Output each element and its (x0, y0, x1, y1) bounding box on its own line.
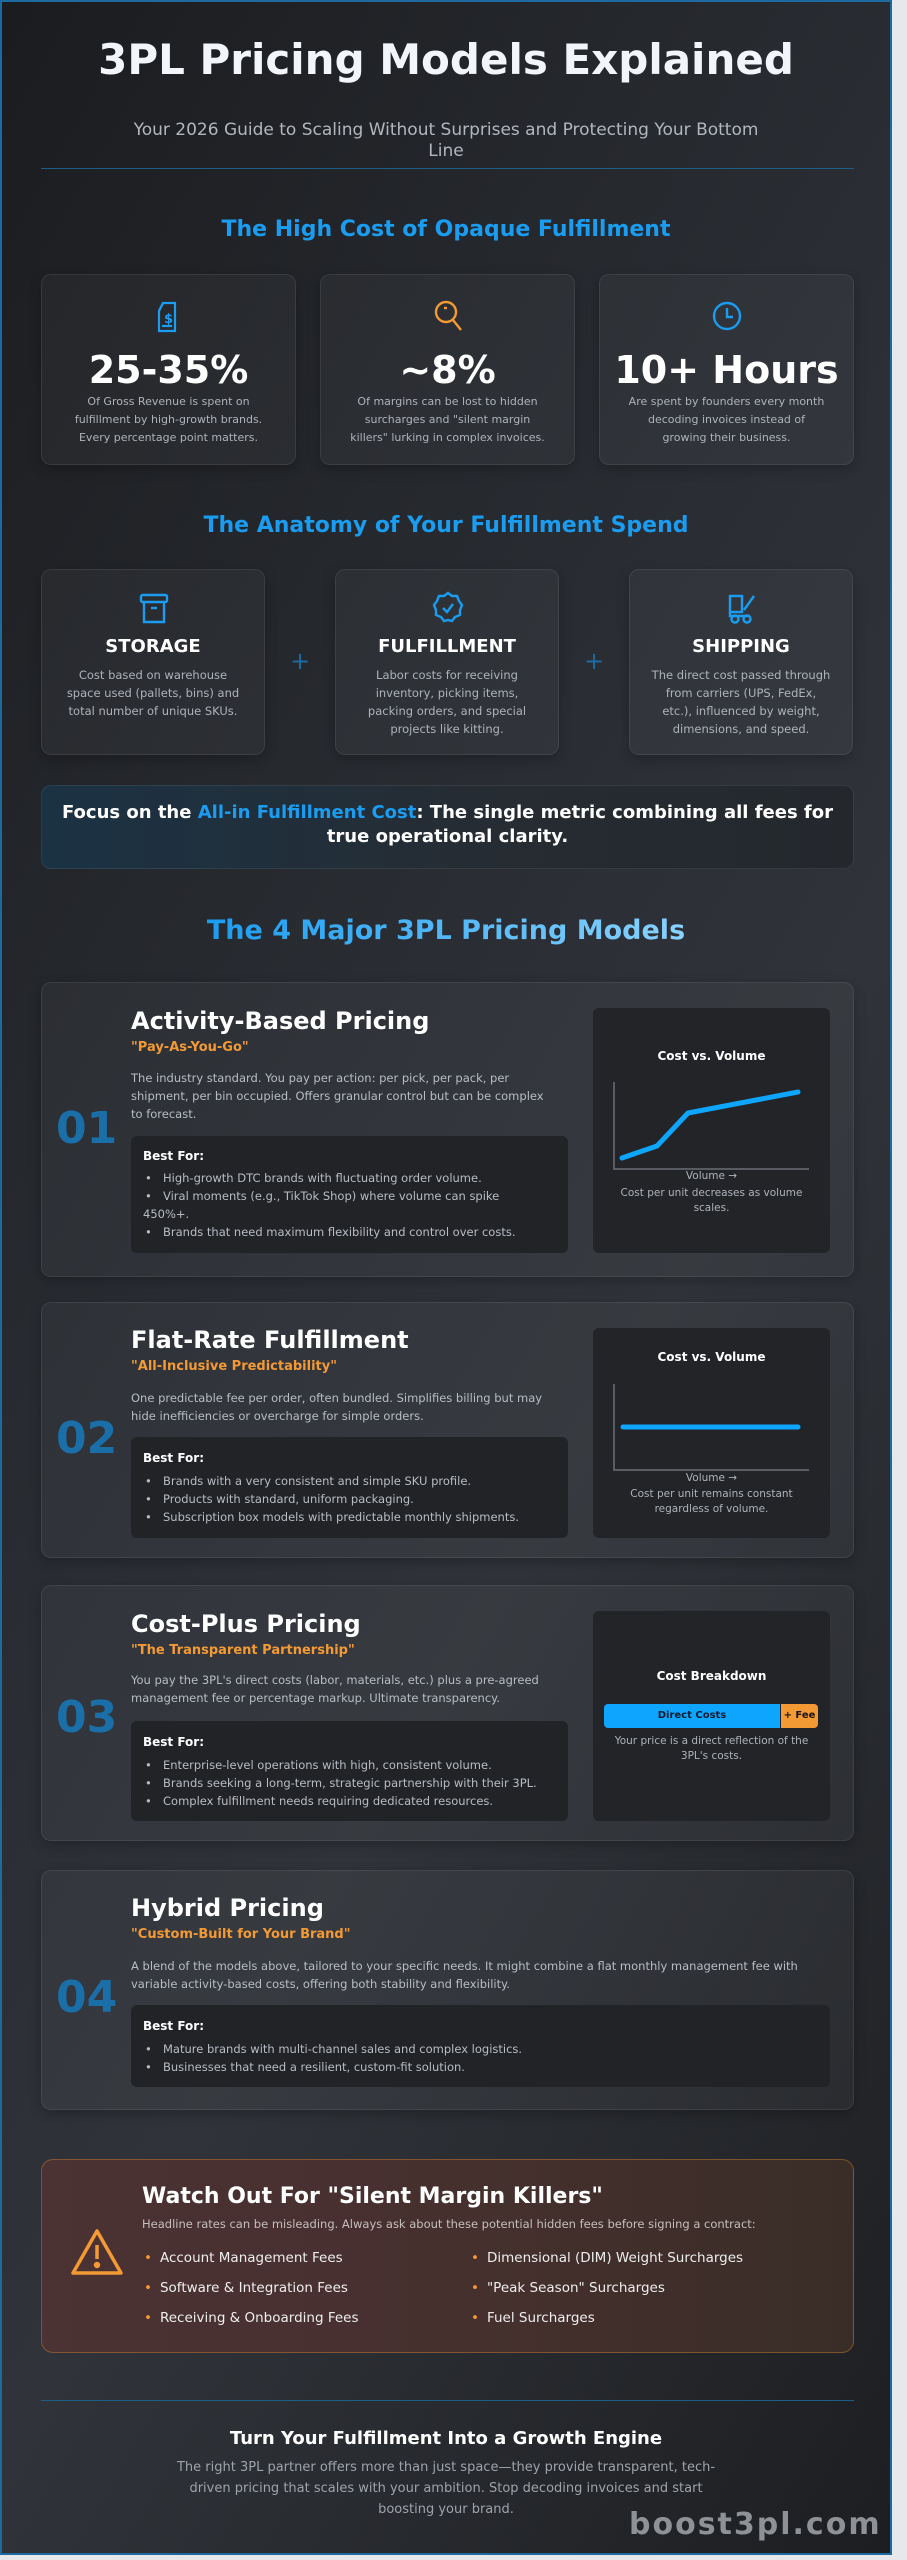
icon: badge check (432, 592, 464, 622)
heading: 4 models: The 4 Major 3PL Pricing Models (207, 915, 685, 946)
footer text: The right 3PL partner offers more than just space—they provide transparent, tech- (177, 2460, 715, 2475)
description: One predictable fee per order, often bundled. Simplifies billing but may (131, 1391, 542, 1405)
model title: Hybrid Pricing (131, 1894, 324, 1922)
text: total number of unique SKUs. (69, 704, 237, 718)
footer text (176, 2460, 715, 2517)
text: Labor costs for receiving (376, 668, 518, 682)
chart: cost breakdown: Your price is a direct reflection of the (615, 1735, 808, 1747)
tagline: "All-Inclusive Predictability" (131, 1359, 337, 1374)
description: to forecast. (131, 1107, 196, 1121)
chart: cost vs volume rising: Cost per unit decreases as volume (621, 1187, 802, 1199)
footer text: driven pricing that scales with your ambition. Stop decoding invoices and start (189, 2481, 703, 2496)
text: from carriers (UPS, FedEx, (666, 686, 816, 700)
description: management fee or percentage markup. Ultimate transparency. (131, 1691, 500, 1705)
icon: box (140, 594, 168, 624)
chart: cost vs volume flat: regardless of volume. (655, 1503, 768, 1515)
subtitle: Your 2026 Guide to Scaling Without Surprises and Protecting Your Bottom (134, 120, 758, 140)
number: 04 (56, 1972, 117, 2023)
best for box: Best For: (143, 2019, 204, 2033)
component card: shipping (629, 569, 853, 755)
description (131, 1959, 798, 1991)
text: dimensions, and speed. (673, 722, 809, 736)
number: 01 (56, 1103, 117, 1154)
chart: cost breakdown: Cost Breakdown (657, 1669, 766, 1683)
best for box (131, 2005, 830, 2087)
warning panel: silent margin killers (41, 2159, 854, 2353)
stat card 1 (41, 274, 296, 465)
best for box: Best For: (143, 1451, 204, 1465)
fee list (146, 2250, 743, 2326)
best for box: Brands seeking a long-term, strategic partnership with their 3PL. (163, 1776, 537, 1790)
chart: cost breakdown: + Fee (784, 1710, 815, 1721)
fee list: "Peak Season" Surcharges (487, 2280, 665, 2296)
description (131, 1673, 539, 1705)
text: etc.), influenced by weight, (662, 704, 820, 718)
subtitle: Line (428, 141, 464, 161)
title: 3PL Pricing Models Explained (98, 35, 794, 84)
heading: high cost: The High Cost of Opaque Fulfillment (222, 217, 670, 242)
stat text: Are spent by founders every month (629, 395, 824, 408)
description: hide inefficiencies or overcharge for simple orders. (131, 1409, 424, 1423)
title: STORAGE (105, 636, 201, 657)
icon: invoice (158, 302, 176, 332)
fee list: Dimensional (DIM) Weight Surcharges (487, 2250, 743, 2266)
description: shipment, per bin occupied. Offers granular control but can be complex (131, 1089, 544, 1103)
best for box: Brands with a very consistent and simple SKU profile. (163, 1474, 471, 1488)
fee list: Software & Integration Fees (160, 2280, 348, 2296)
number: 03 (56, 1692, 117, 1743)
description: The industry standard. You pay per action: per pick, per pack, per (131, 1071, 509, 1085)
stat text (350, 395, 545, 444)
description: A blend of the models above, tailored to your specific needs. It might combine a flat monthly management fee with (131, 1959, 798, 1973)
bar: direct costs + fee (604, 1704, 780, 1728)
model card 1: activity-based (41, 982, 854, 1277)
chart: cost vs volume rising: Cost vs. Volume (658, 1049, 765, 1063)
best for box: Mature brands with multi-channel sales and complex logistics. (163, 2042, 522, 2056)
icon: dolly (728, 594, 755, 624)
fee list: Receiving & Onboarding Fees (160, 2310, 359, 2326)
chart: cost vs volume flat: Cost vs. Volume (658, 1350, 765, 1364)
stat text: surcharges and "silent margin (365, 413, 530, 426)
text: packing orders, and special (368, 704, 526, 718)
text: The direct cost passed through (652, 668, 830, 682)
bar: direct costs + fee: Direct Costs (658, 1710, 726, 1721)
stat text: growing their business. (662, 431, 791, 444)
chart: cost vs volume rising: scales. (694, 1202, 729, 1214)
stat text: fulfillment by high-growth brands. (75, 413, 262, 426)
best for box (131, 1136, 568, 1253)
plus sign: + (290, 647, 310, 675)
title: FULFILLMENT (378, 636, 516, 657)
model title: Cost-Plus Pricing (131, 1610, 361, 1638)
description (131, 1391, 542, 1423)
best for box (131, 1437, 568, 1538)
description (130, 1071, 544, 1121)
number: 02 (56, 1413, 117, 1464)
callout: all-in cost: true operational clarity. (327, 826, 568, 847)
stat card 3 (599, 274, 854, 465)
component card: fulfillment (335, 569, 559, 755)
best for box: Best For: (143, 1735, 204, 1749)
warning title: Watch Out For "Silent Margin Killers" (142, 2184, 603, 2209)
stat text: Of Gross Revenue is spent on (87, 395, 250, 408)
icon: warning triangle (71, 2229, 123, 2275)
model title: Flat-Rate Fulfillment (131, 1326, 409, 1354)
model title: Activity-Based Pricing (131, 1007, 429, 1035)
text (67, 668, 239, 718)
stat card 2 (320, 274, 575, 465)
stat text: Every percentage point matters. (79, 431, 258, 444)
best for box: High-growth DTC brands with fluctuating order volume. (163, 1171, 482, 1185)
callout: all-in cost: Focus on the All-in Fulfillment Cost: The single metric combining all fees for (62, 802, 833, 823)
fee list: Fuel Surcharges (487, 2310, 595, 2326)
model card 2: flat-rate (41, 1302, 854, 1558)
description: You pay the 3PL's direct costs (labor, materials, etc.) plus a pre-agreed (131, 1673, 539, 1687)
best for box: Subscription box models with predictable monthly shipments. (163, 1510, 519, 1524)
stat number: ~8% (399, 348, 496, 392)
title: SHIPPING (692, 636, 790, 657)
callout: all-in cost (41, 785, 854, 869)
text: inventory, picking items, (376, 686, 518, 700)
plus sign: + (584, 647, 604, 675)
model card 3: cost-plus (41, 1585, 854, 1841)
chart: cost vs volume rising (593, 1008, 830, 1253)
stat text (75, 395, 262, 444)
best for box: Enterprise-level operations with high, consistent volume. (163, 1758, 492, 1772)
text: projects like kitting. (390, 722, 504, 736)
warning subtitle: Headline rates can be misleading. Always ask about these potential hidden fees before signing a contract: (142, 2217, 756, 2231)
footer heading: Turn Your Fulfillment Into a Growth Engine (230, 2428, 662, 2449)
tagline: "The Transparent Partnership" (131, 1643, 355, 1658)
brand watermark: boost3pl.com (629, 2507, 882, 2542)
stat text: killers" lurking in complex invoices. (350, 431, 545, 444)
icon: invoice: $ (164, 312, 173, 327)
text: space used (pallets, bins) and (67, 686, 239, 700)
best for box: Brands that need maximum flexibility and control over costs. (163, 1225, 516, 1239)
stat text: Of margins can be lost to hidden (357, 395, 538, 408)
best for box: 450%+. (143, 1207, 189, 1221)
chart: cost breakdown: 3PL's costs. (681, 1750, 742, 1762)
best for box: Best For: (143, 1149, 204, 1163)
stat text: decoding invoices instead of (648, 413, 805, 426)
heading: anatomy: The Anatomy of Your Fulfillment Spend (203, 513, 688, 538)
tagline: "Pay-As-You-Go" (131, 1040, 249, 1055)
best for box: Products with standard, uniform packaging. (163, 1492, 414, 1506)
best for box: Complex fulfillment needs requiring dedicated resources. (163, 1794, 493, 1808)
description: variable activity-based costs, offering both stability and flexibility. (131, 1977, 510, 1991)
subtitle (134, 120, 758, 161)
footer text: boosting your brand. (378, 2502, 514, 2517)
chart: cost vs volume flat: Cost per unit remains constant (630, 1488, 793, 1500)
icon: magnifier (434, 300, 462, 331)
chart: cost breakdown (593, 1611, 830, 1821)
best for box: Businesses that need a resilient, custom-fit solution. (163, 2060, 465, 2074)
best for box: Viral moments (e.g., TikTok Shop) where volume can spike (163, 1189, 499, 1203)
best for box (131, 1721, 568, 1821)
icon: clock (712, 302, 742, 330)
text (652, 668, 830, 736)
stat text (628, 395, 824, 444)
text: Cost based on warehouse (79, 668, 227, 682)
model card 4: hybrid (41, 1870, 854, 2110)
component card: storage (41, 569, 265, 755)
tagline: "Custom-Built for Your Brand" (131, 1927, 351, 1942)
chart: cost vs volume flat (593, 1328, 830, 1538)
text (368, 668, 526, 736)
stat number: 10+ Hours (614, 348, 839, 392)
chart: cost vs volume rising: Volume → (686, 1170, 737, 1182)
stat number: 25-35% (89, 348, 248, 392)
fee list: Account Management Fees (160, 2250, 343, 2266)
chart: cost vs volume flat: Volume → (686, 1472, 737, 1484)
